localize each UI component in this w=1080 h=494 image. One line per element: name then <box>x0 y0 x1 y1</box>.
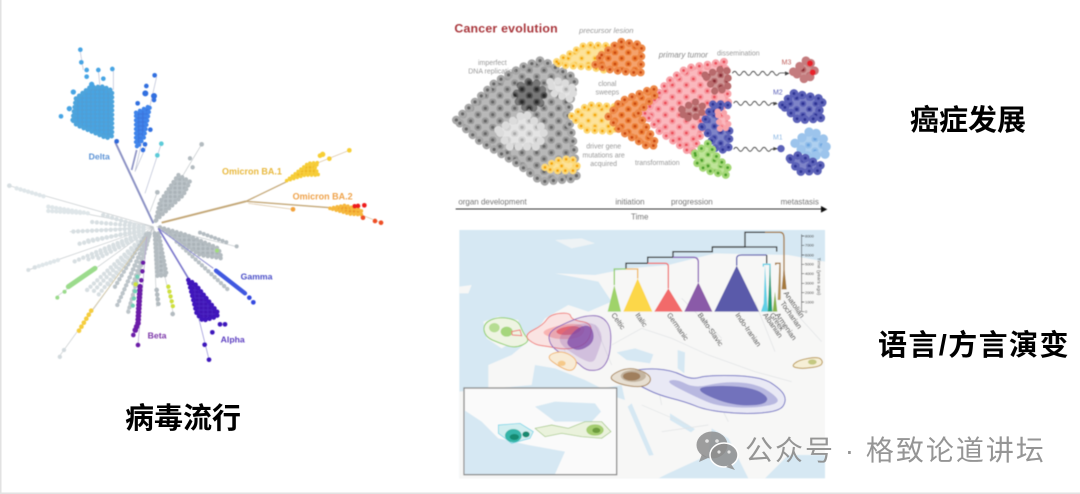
time axis <box>456 198 827 221</box>
time scale: 8000 <box>805 233 815 238</box>
density: Germanic <box>512 313 591 349</box>
annotations: imperfect <box>478 60 507 67</box>
phylogeny tree <box>608 232 787 312</box>
watermark text: 公众号 · 格致论道讲坛 <box>745 435 1046 466</box>
time axis: Time <box>631 212 649 221</box>
label: Omicron BA.2: Omicron BA.2 <box>293 192 353 202</box>
chart: central grey fan <box>133 142 239 308</box>
title: Cancer evolution: Cancer evolution <box>454 22 558 36</box>
time scale: 7000 <box>805 243 815 248</box>
density: Anatolian <box>611 369 650 387</box>
chart: Gamma, Alpha and Beta clades <box>131 228 273 362</box>
annotations: M2 <box>773 89 783 96</box>
density: Celtic <box>484 318 528 347</box>
annotations: M1 <box>773 134 783 141</box>
annotations: primary tumor <box>658 50 708 59</box>
heading: 病毒流行: 病毒流行 <box>125 402 241 435</box>
inset map <box>464 388 617 475</box>
language labels <box>609 289 807 348</box>
language labels: Greek <box>768 311 787 333</box>
chart: dissemination arrows <box>732 71 790 151</box>
annotations: mutations are <box>583 153 625 160</box>
heading: 癌症发展: 癌症发展 <box>910 104 1026 137</box>
chart: Omicron clades <box>162 148 383 225</box>
time scale <box>802 233 822 314</box>
panel: language evolution map <box>459 230 825 478</box>
time scale: 1000 <box>805 299 815 304</box>
chart: primary tumor <box>608 62 730 175</box>
language labels: Indo-Iranian <box>733 311 763 348</box>
language labels: Tocharian <box>778 299 804 331</box>
chart: precursor lesion <box>545 42 642 171</box>
density: Italic <box>549 352 576 370</box>
language labels: Celtic <box>609 311 627 331</box>
time scale: 4000 <box>805 271 815 276</box>
label: Delta: Delta <box>89 152 110 162</box>
language labels: Anatolian <box>782 289 807 320</box>
annotations: precursor lesion <box>578 26 634 35</box>
chart: normal tissue cells <box>456 60 577 182</box>
time axis: progression <box>671 198 713 207</box>
annotations: M3 <box>782 60 791 67</box>
map base <box>459 230 825 478</box>
annotations: dissemination <box>717 50 760 57</box>
panel: virus phylogeny <box>9 47 383 362</box>
language labels: Balto-Slavic <box>696 311 725 348</box>
language labels: Italic <box>633 311 650 329</box>
time axis: initiation <box>615 198 645 207</box>
language labels: Albanian <box>761 311 785 340</box>
density: Indo-Iranian <box>624 369 785 413</box>
label: Beta: Beta <box>148 331 167 341</box>
annotations: sweeps <box>595 90 620 97</box>
time scale: Time (years ago) <box>816 258 822 295</box>
time axis: organ development <box>458 198 527 207</box>
annotations: clonal <box>598 81 617 88</box>
chart: metastases <box>777 59 827 172</box>
label: Gamma: Gamma <box>241 271 273 281</box>
chart: grey lineages lower left <box>9 186 176 358</box>
panel: cancer evolution <box>454 22 827 221</box>
time scale: 5000 <box>805 262 815 267</box>
time axis: metastasis <box>781 198 819 207</box>
annotations: transformation <box>635 160 680 167</box>
label: Alpha: Alpha <box>221 334 245 344</box>
time scale: 3000 <box>805 281 815 286</box>
annotations <box>468 26 791 168</box>
time scale: 0 <box>805 309 808 314</box>
time scale: 6000 <box>805 252 815 257</box>
annotations: acquired <box>590 161 617 168</box>
annotations: driver gene <box>586 144 621 151</box>
watermark: WeChat official account <box>696 432 1046 470</box>
density: Balto-Slavic <box>549 316 611 370</box>
language labels: Germanic <box>665 311 691 342</box>
label: Omicron BA.1: Omicron BA.1 <box>222 167 282 177</box>
language labels: Armenian <box>773 311 799 342</box>
chart: green lineage <box>57 237 147 331</box>
annotations: DNA replication <box>468 69 517 76</box>
heading: 语言/方言演变: 语言/方言演变 <box>878 329 1070 362</box>
time scale: 2000 <box>805 290 815 295</box>
chart: Delta clade <box>59 47 164 223</box>
density: Tocharian <box>793 358 822 368</box>
icon: WeChat <box>696 432 738 470</box>
